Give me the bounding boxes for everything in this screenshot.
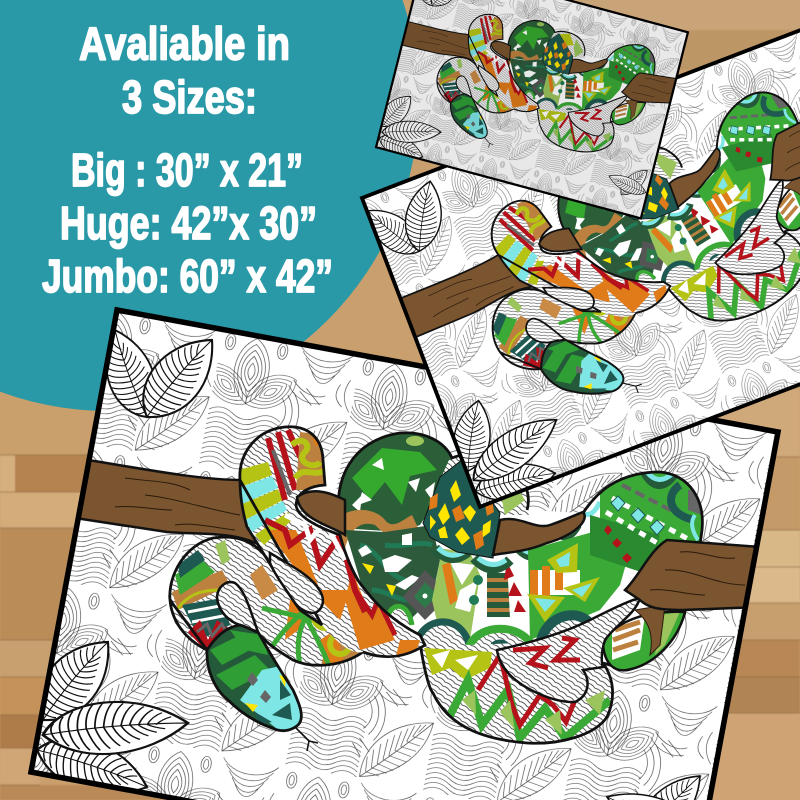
leaves: top left — [93, 323, 230, 432]
snake: hook — [217, 582, 258, 632]
size: big: Big : 30” x 21” — [71, 144, 303, 196]
size: jumbo: Jumbo: 60” x 42” — [42, 250, 333, 302]
poster: big size — [22, 310, 778, 800]
snake: head — [207, 625, 305, 735]
snake: lower coil — [170, 537, 385, 670]
poster artwork — [22, 323, 760, 800]
poster border — [31, 310, 778, 800]
poster: jumbo preview small — [369, 0, 691, 221]
heading line 2: 3 Sizes: — [122, 71, 257, 123]
snake: lower loop — [420, 640, 613, 743]
snake: white lobe — [270, 553, 323, 613]
size: huge: Huge: 42”x 30” — [60, 197, 317, 249]
snake: right lower lobe — [603, 605, 685, 670]
snake: tail and zigzag band — [238, 427, 425, 660]
branch: middle — [493, 512, 585, 555]
heading: sizes text — [42, 18, 333, 302]
poster: huge size — [305, 0, 800, 583]
branch: left — [75, 460, 268, 550]
snake: main body — [335, 430, 710, 670]
swirl: dark green centre left — [345, 525, 440, 622]
leaves: bottom left — [22, 625, 191, 800]
poster paper with doodle pattern — [31, 310, 778, 800]
doodle line art — [31, 310, 778, 800]
branch: right — [625, 540, 760, 610]
snake: front neck band — [497, 598, 640, 702]
snake: tongue — [296, 728, 318, 751]
heading line 1: Avaliable in — [79, 18, 290, 70]
teal size panel circle — [0, 0, 419, 411]
leaves: bottom right — [601, 763, 713, 800]
branch: centre stub — [297, 491, 345, 535]
